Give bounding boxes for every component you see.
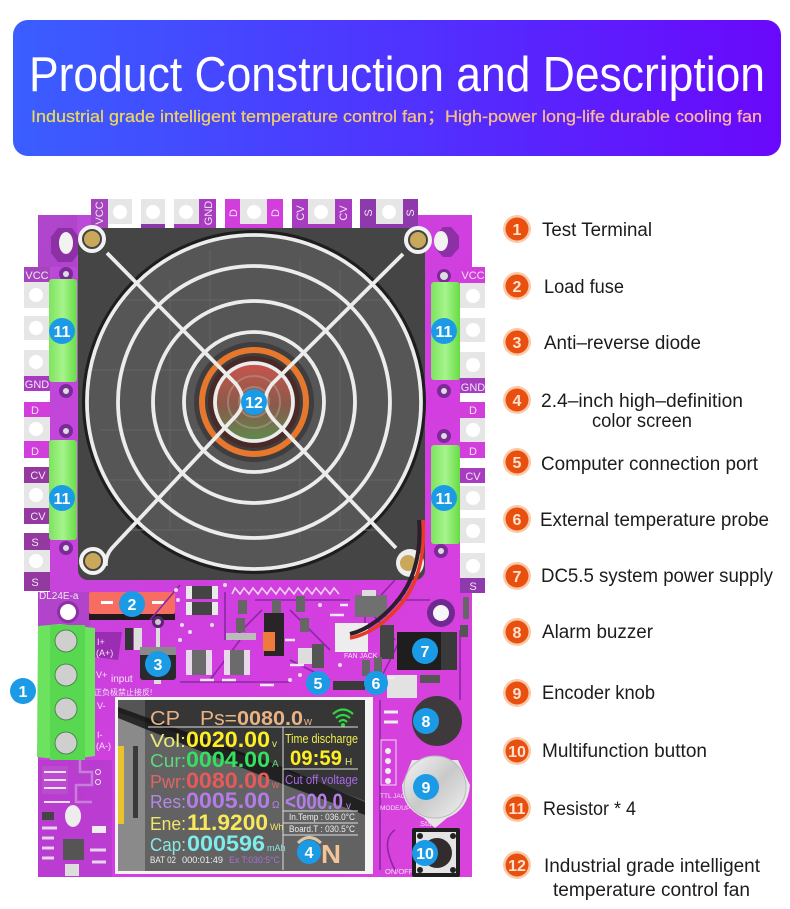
legend item 2: 2 <box>513 279 522 296</box>
legend item 4: 2.4–inch high–definition <box>541 391 743 412</box>
legend item 1 <box>503 215 652 243</box>
badge: 9 <box>413 774 439 800</box>
circuit components: 正负极禁止接反! <box>94 687 152 697</box>
screen readouts: 000:01:49 <box>182 855 223 865</box>
screen readouts: Res: <box>150 792 186 812</box>
legend item 12: temperature control fan <box>553 880 750 901</box>
screen readouts: Board.T : 030.5°C <box>289 824 355 834</box>
badge: 4 <box>297 840 321 864</box>
circuit components: DL24E-a <box>39 591 79 602</box>
circuit components: ON/OFF <box>385 867 414 876</box>
screen readouts: CP <box>150 708 180 730</box>
badge: 11 top right: 11 <box>436 324 453 341</box>
badge: 6: 6 <box>372 676 381 693</box>
legend item 12: 12 <box>508 858 526 875</box>
legend item 11: 11 <box>509 801 526 818</box>
circuit components: V+ <box>96 670 107 680</box>
screen readouts: mAh <box>267 843 286 853</box>
badge: 11 top right <box>431 318 457 344</box>
screen readouts: v <box>346 801 351 812</box>
screen readouts: 0004.00 <box>186 747 270 772</box>
circuit components: MODE/UP <box>380 805 410 812</box>
badge: 3: 3 <box>154 657 163 674</box>
screen readouts: Wh <box>270 822 284 832</box>
screen readouts: H <box>345 757 352 768</box>
badge: 11 top left <box>49 318 75 344</box>
screen readouts: 0005.00 <box>186 788 270 813</box>
legend item 2: Load fuse <box>544 277 624 298</box>
top terminal tabs: CV <box>295 205 307 221</box>
legend item 9 <box>503 679 655 707</box>
top terminal tabs: D <box>228 209 240 217</box>
left terminal tabs: S <box>31 577 39 589</box>
screen readouts: 0080.00 <box>186 768 270 793</box>
screen readouts: w <box>303 716 312 728</box>
circuit board <box>24 199 485 877</box>
top terminal tabs: VCC <box>94 201 106 225</box>
screen readouts: Ene: <box>150 814 186 834</box>
legend item 6 <box>503 505 769 533</box>
fuse <box>89 592 175 620</box>
screen readouts: Ω <box>272 800 280 811</box>
badge: 3 <box>145 651 171 677</box>
badge: 9: 9 <box>422 780 431 797</box>
right terminal tabs: CV <box>465 471 481 483</box>
legend item 7: DC5.5 system power supply <box>541 566 773 587</box>
circuit components: TTL JACK <box>380 793 410 800</box>
badge: 8: 8 <box>422 714 431 731</box>
badge: 12: 12 <box>245 395 263 412</box>
alarm buzzer <box>412 696 462 746</box>
badge: 7: 7 <box>421 644 430 661</box>
legend item 2 <box>503 272 624 300</box>
badge: 2: 2 <box>128 597 137 614</box>
left terminal tabs: S <box>31 537 39 549</box>
circuit components: I+ <box>97 637 105 647</box>
top terminal tabs <box>91 199 418 228</box>
screen readouts: 000596 <box>187 831 265 856</box>
left terminal tabs: GND <box>25 379 49 391</box>
screws <box>80 227 430 577</box>
badge: 10: 10 <box>416 846 434 863</box>
screen readouts: Cap: <box>150 835 186 855</box>
mounting holes <box>51 227 459 627</box>
title banner <box>13 20 781 156</box>
badge: 1: 1 <box>19 684 28 701</box>
legend item 5: Computer connection port <box>541 454 759 475</box>
screen readouts: w <box>271 780 280 791</box>
circuit components: (A-) <box>96 741 111 751</box>
subtitle: Industrial grade intelligent temperature control fan；High-power long-life durable cooling fan <box>31 107 762 126</box>
terminal block <box>37 624 95 760</box>
screen readouts: In.Temp : 036.0°C <box>289 812 355 822</box>
fan housing <box>78 228 425 580</box>
screen readouts: 09:59 <box>290 747 342 770</box>
legend item 10: Multifunction button <box>542 741 707 762</box>
legend item 10: 10 <box>508 744 526 761</box>
badge: 11 bottom left: 11 <box>54 491 71 508</box>
badge: 2 <box>119 591 145 617</box>
badge: 11 bottom left <box>49 485 75 511</box>
right terminal tabs: S <box>469 581 477 593</box>
right terminal tabs: GND <box>461 382 485 394</box>
left terminal tabs: D <box>31 446 39 458</box>
right terminal tabs: VCC <box>461 270 485 282</box>
badge: 12 <box>241 389 267 415</box>
cooling fan <box>78 227 430 580</box>
top terminal tabs: GND <box>203 201 215 225</box>
left terminal tabs: D <box>31 405 39 417</box>
circuit components: input <box>111 674 133 685</box>
legend item 3: 3 <box>513 335 522 352</box>
legend item 11 <box>503 794 636 822</box>
legend item 6: External temperature probe <box>540 510 769 531</box>
screen readouts: BAT 02 <box>150 855 176 865</box>
legend item 12: Industrial grade intelligent <box>544 856 761 877</box>
screen readouts: 0020.00 <box>186 727 270 752</box>
wire grill <box>87 235 421 569</box>
screen readouts: 11.9200 <box>187 810 268 835</box>
screen readouts: Cur: <box>150 751 186 771</box>
top terminal tabs: D <box>270 209 282 217</box>
anti-reverse diode <box>140 628 176 684</box>
badge: 5: 5 <box>314 676 323 693</box>
legend item 6: 6 <box>513 512 522 529</box>
top terminal tabs: S <box>363 209 375 217</box>
colour screen <box>115 697 373 874</box>
badge: 4: 4 <box>305 845 314 862</box>
legend item 7 <box>503 562 773 590</box>
legend item 1: 1 <box>513 222 522 239</box>
screen readouts: Pwr: <box>150 772 186 792</box>
badge: 7 <box>412 638 438 664</box>
legend item 12 <box>503 851 761 901</box>
badge: 8 <box>413 708 439 734</box>
top terminal tabs: S <box>405 209 417 217</box>
fan hub <box>194 342 314 462</box>
legend item 5 <box>503 448 759 476</box>
legend item 10 <box>503 737 707 765</box>
screen readouts: v <box>272 739 277 750</box>
legend item 3 <box>503 328 701 356</box>
screen readouts: Vol: <box>150 731 186 751</box>
right terminal tabs: D <box>469 446 477 458</box>
screen readouts: <000.0 <box>285 789 343 814</box>
legend item 8: 8 <box>513 625 522 642</box>
circuit components: FAN JACK <box>344 653 378 660</box>
badge: 10 <box>412 840 438 866</box>
badge: 6 <box>364 671 388 695</box>
circuit components <box>38 580 469 877</box>
left terminal tabs <box>24 267 50 591</box>
right terminal tabs <box>460 267 485 593</box>
legend item 4: 4 <box>513 393 522 410</box>
screen readouts: Cut off voltage <box>285 772 358 787</box>
badge: 1 <box>10 678 36 704</box>
badge: 11 top left: 11 <box>54 324 71 341</box>
screen readouts: N <box>321 839 341 869</box>
resistors <box>49 279 460 544</box>
legend item 3: Anti–reverse diode <box>544 333 701 354</box>
right terminal tabs: D <box>469 405 477 417</box>
left terminal tabs: CV <box>30 470 46 482</box>
multifunction button <box>412 828 460 877</box>
legend item 7: 7 <box>513 569 522 586</box>
screen readouts: Ps= <box>200 708 237 730</box>
legend item 8: Alarm buzzer <box>542 622 654 643</box>
circuit components: Start <box>420 819 437 828</box>
left terminal tabs: VCC <box>25 270 49 282</box>
circuit components: I- <box>97 730 103 740</box>
circuit components: (A+) <box>96 648 113 658</box>
encoder knob <box>402 756 470 828</box>
DC5.5 power socket <box>397 632 457 670</box>
legend item 4 <box>503 386 743 432</box>
screen readouts <box>148 708 358 870</box>
circuit components: V- <box>97 701 106 711</box>
screen readouts: A <box>272 759 279 770</box>
badge: 11 bottom right <box>431 485 457 511</box>
legend item 9: 9 <box>513 686 522 703</box>
screen readouts: Time discharge <box>285 731 358 746</box>
legend item 9: Encoder knob <box>542 683 655 704</box>
legend item 5: 5 <box>513 455 522 472</box>
badge: 11 bottom right: 11 <box>436 491 453 508</box>
screen readouts: 0080.0 <box>237 708 303 730</box>
fan cable and connector <box>335 520 423 652</box>
legend item 8 <box>503 618 654 646</box>
legend item 11: Resistor * 4 <box>543 799 636 820</box>
top terminal tabs: CV <box>338 205 350 221</box>
screen readouts: Ex T:030:5°C <box>229 855 280 865</box>
badge: 5 <box>306 671 330 695</box>
legend item 1: Test Terminal <box>542 220 652 241</box>
legend item 4: color screen <box>592 411 692 432</box>
left terminal tabs: CV <box>30 511 46 523</box>
